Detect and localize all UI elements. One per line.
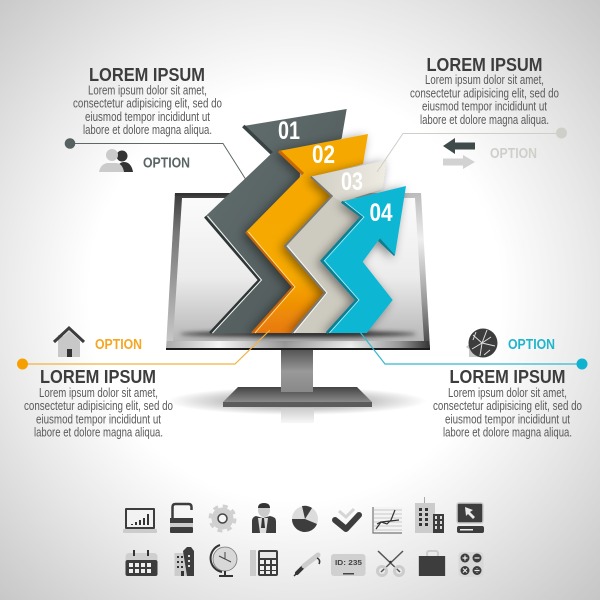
icon: people bbox=[99, 149, 133, 172]
stand reflection bbox=[281, 408, 314, 423]
text block: bottom right: LOREM IPSUM bbox=[450, 366, 566, 387]
text block: bottom left: consectetur adipisicing elit, sed do bbox=[24, 398, 173, 413]
icon: calendar bbox=[126, 550, 158, 576]
text block: bottom left: eiusmod tempor incididunt ut bbox=[36, 412, 161, 426]
text block: top right: LOREM IPSUM bbox=[426, 54, 542, 75]
zigzag arrow 03 bbox=[285, 160, 387, 333]
connector: top left bbox=[65, 138, 248, 183]
icon: briefcase bbox=[418, 551, 446, 576]
icon: check mark bbox=[335, 509, 359, 529]
number 04: 04 bbox=[370, 199, 393, 227]
text block: top left: Lorem ipsum dolor sit amet, bbox=[88, 82, 207, 98]
icon: math symbols bbox=[458, 552, 484, 577]
icon: ID badge: ID: 235 bbox=[335, 558, 362, 567]
icon: gear bbox=[210, 506, 235, 531]
text block: top left: consectetur adipisicing elit, sed do bbox=[73, 96, 222, 110]
text block: top left: labore et dolore magna aliqua. bbox=[83, 122, 212, 137]
icon: globe head bbox=[466, 328, 498, 358]
icon row 1 bbox=[123, 497, 484, 533]
icon: computer cursor bbox=[457, 503, 484, 533]
zigzag arrow 01 bbox=[205, 109, 347, 333]
text block: top left bbox=[73, 64, 222, 137]
monitor frame bbox=[166, 193, 298, 348]
text block: top right: labore et dolore magna aliqua. bbox=[420, 112, 549, 127]
icon: ID badge bbox=[331, 554, 366, 576]
number 01: 01 bbox=[278, 117, 300, 145]
zigzag arrow 02 bbox=[246, 134, 368, 333]
icon: pen bbox=[294, 555, 320, 576]
text block: bottom left: labore et dolore magna aliqua. bbox=[34, 424, 163, 440]
icon: desk globe bbox=[211, 545, 237, 576]
text block: bottom left: Lorem ipsum dolor sit amet, bbox=[39, 385, 158, 400]
option label: top left: OPTION bbox=[143, 156, 190, 172]
icon: house bbox=[54, 328, 84, 357]
text block: bottom right bbox=[433, 366, 582, 440]
stand base bbox=[223, 387, 372, 407]
text block: bottom left bbox=[24, 366, 173, 440]
text block: bottom left: LOREM IPSUM bbox=[40, 366, 156, 387]
icon: line chart bbox=[373, 507, 402, 533]
icon: businessman bbox=[252, 503, 276, 533]
monitor bbox=[166, 193, 430, 423]
icon: pie chart bbox=[292, 506, 318, 532]
option label: top right: OPTION bbox=[490, 146, 537, 162]
text block: top right: Lorem ipsum dolor sit amet, bbox=[425, 72, 544, 87]
stand shadow bbox=[167, 387, 427, 415]
number 03: 03 bbox=[341, 168, 363, 196]
icon: exchange arrows bbox=[443, 138, 475, 169]
icon: monitor chart bbox=[123, 508, 157, 533]
connector: top right bbox=[377, 128, 567, 172]
text block: top right: eiusmod tempor incididunt ut bbox=[422, 98, 547, 114]
text block: top right bbox=[410, 54, 559, 127]
connector: bottom left bbox=[17, 330, 270, 370]
number 02: 02 bbox=[312, 141, 335, 169]
zigzag arrow 04 bbox=[322, 186, 406, 333]
icon: open lock bbox=[170, 504, 193, 533]
text block: top left: LOREM IPSUM bbox=[89, 64, 205, 85]
icon: apartment building bbox=[174, 547, 194, 576]
icon: office buildings bbox=[415, 497, 444, 533]
stand neck bbox=[281, 350, 313, 393]
icon: calculator bbox=[250, 550, 278, 576]
option label: bottom left: OPTION bbox=[95, 337, 142, 353]
monitor bezel bbox=[166, 341, 430, 348]
text block: top left: eiusmod tempor incididunt ut bbox=[85, 109, 210, 124]
option label: bottom right: OPTION bbox=[508, 337, 555, 353]
screen shadow bbox=[180, 331, 416, 337]
connector: bottom right bbox=[360, 332, 588, 370]
monitor screen bbox=[173, 198, 424, 341]
icon: scissors bbox=[378, 551, 404, 576]
icon row 2 bbox=[126, 545, 484, 577]
